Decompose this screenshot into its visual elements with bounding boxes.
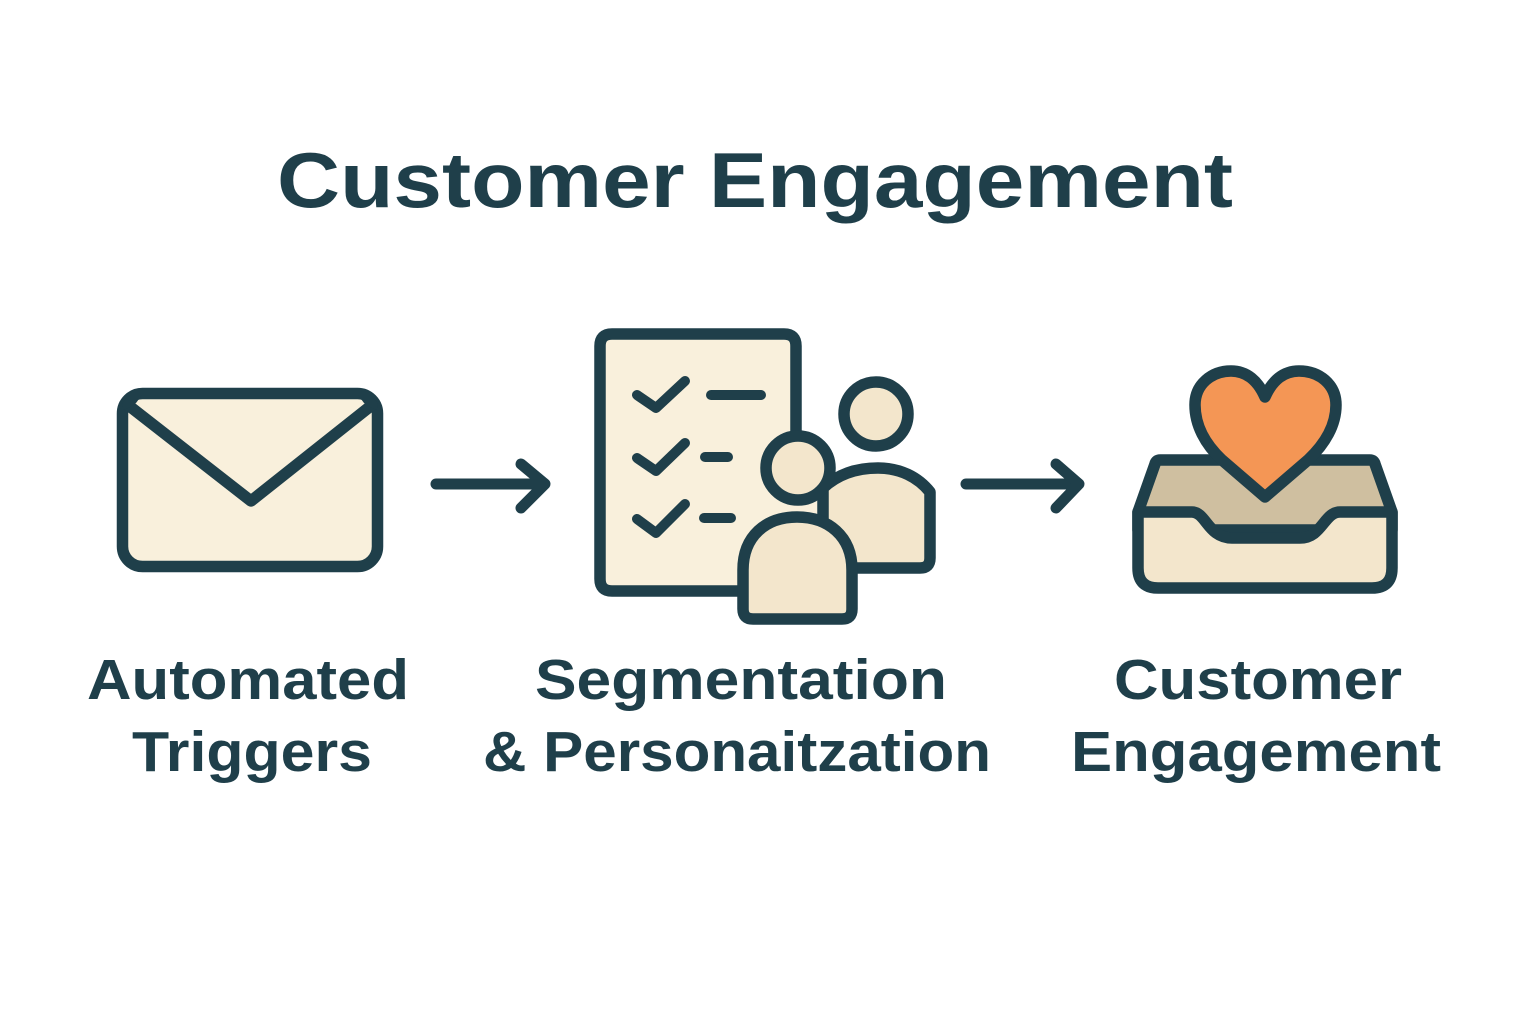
person: back <box>823 382 930 568</box>
label: customer engagement: Customer <box>1114 648 1402 712</box>
person: middle head <box>766 436 830 500</box>
label: segmentation and personalization <box>483 648 991 784</box>
checklist document <box>600 334 822 591</box>
arrow: segmentation to engagement <box>966 464 1079 508</box>
tray front <box>1138 512 1392 588</box>
arrow: triggers to segmentation <box>436 464 545 508</box>
label: customer engagement <box>1071 648 1441 784</box>
label: automated triggers: Triggers <box>132 720 372 784</box>
checklist marks <box>637 381 761 533</box>
label: automated triggers <box>87 648 409 784</box>
label: customer engagement: Engagement <box>1071 720 1441 784</box>
label: automated triggers: Automated <box>87 648 409 712</box>
person: front <box>743 517 852 619</box>
tray back <box>1138 460 1392 530</box>
icon: envelope <box>122 394 378 566</box>
title: Customer Engagement <box>277 136 1233 224</box>
icon: inbox tray with heart <box>1138 371 1392 588</box>
label: segmentation and personalization: & Personaitzation <box>483 720 991 784</box>
label: segmentation and personalization: Segmentation <box>535 648 947 712</box>
heart <box>1195 371 1336 497</box>
icon: checklist and people <box>600 334 930 619</box>
